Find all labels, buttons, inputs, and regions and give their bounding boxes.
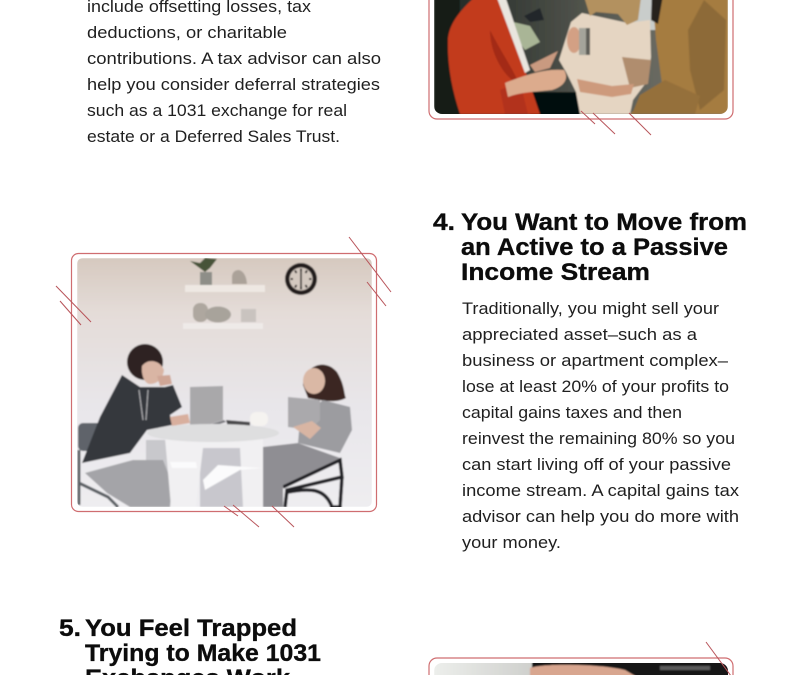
text block: section 3 closing paragraph: estate or a Deferred Sales Trust. bbox=[87, 128, 340, 146]
photo panel: three people talking bbox=[429, 0, 733, 135]
hand and mug bbox=[567, 27, 581, 53]
shelves bbox=[185, 285, 265, 292]
image frame bbox=[72, 254, 376, 512]
image frame bbox=[429, 658, 733, 675]
hair bbox=[582, 0, 642, 25]
forearm bbox=[577, 79, 634, 97]
black counter bbox=[530, 92, 580, 114]
heading: section 4: You Want to Move from bbox=[461, 209, 747, 236]
text block: section 4 paragraph: advisor can help you do more with bbox=[462, 508, 739, 526]
text block: section 3 closing paragraph bbox=[87, 0, 381, 146]
white shirt bbox=[494, 0, 530, 73]
text block: section 3 closing paragraph: contributions. A tax advisor can also bbox=[87, 50, 381, 68]
text block: section 4 paragraph bbox=[462, 300, 739, 552]
photo panel: two women at a table bbox=[56, 237, 391, 527]
heading: section 5: Trying to Make 1031 bbox=[85, 640, 321, 667]
left woman: legs bbox=[85, 460, 172, 507]
text block: section 4 paragraph: Traditionally, you might sell your bbox=[462, 300, 720, 318]
text block: section 3 closing paragraph: deductions, or charitable bbox=[87, 24, 287, 42]
heading: section 4: an Active to a Passive bbox=[461, 234, 728, 261]
clock bbox=[285, 263, 317, 295]
left woman: hoodie bbox=[82, 375, 182, 463]
clasped hands bbox=[505, 70, 566, 97]
heading: section 4 bbox=[433, 209, 747, 286]
tablet bbox=[288, 397, 320, 430]
text block: section 4 paragraph: business or apartment complex– bbox=[462, 352, 728, 370]
heading: section 4: Income Stream bbox=[461, 259, 650, 286]
text block: section 4 paragraph: lose at least 20% of your profits to bbox=[462, 378, 729, 396]
laptop bbox=[190, 386, 223, 431]
left woman: head bbox=[127, 344, 163, 380]
text block: section 4 paragraph: income stream. A capital gains tax bbox=[462, 482, 739, 500]
right woman: sweater bbox=[298, 400, 352, 453]
text block: section 4 paragraph: appreciated asset–such as a bbox=[462, 326, 697, 344]
cream sweater bbox=[559, 13, 651, 114]
photo panel: hand over keyboard bbox=[429, 642, 734, 675]
text block: section 3 closing paragraph: help you consider deferral strategies bbox=[87, 76, 380, 94]
accent lines bbox=[56, 237, 391, 527]
right woman: hair bbox=[303, 365, 346, 401]
text block: section 4 paragraph: capital gains taxes and then bbox=[462, 404, 682, 422]
text block: section 3 closing paragraph: such as a 1031 exchange for real bbox=[87, 102, 347, 120]
heading: section 5 bbox=[59, 615, 321, 675]
left chair bbox=[77, 422, 98, 452]
text block: section 4 paragraph: can start living off of your passive bbox=[462, 456, 731, 474]
heading: section 5: You Feel Trapped bbox=[85, 615, 297, 642]
book and cup bbox=[226, 420, 250, 427]
heading: section 5: 5. bbox=[59, 615, 81, 642]
table bbox=[200, 448, 245, 507]
plant and ornaments bbox=[190, 258, 217, 272]
red jacket bbox=[448, 0, 540, 114]
heading: section 4: 4. bbox=[433, 209, 455, 236]
image frame bbox=[429, 0, 733, 119]
accent lines bbox=[706, 642, 734, 675]
tan jacket bbox=[630, 0, 728, 114]
text block: section 4 paragraph: your money. bbox=[462, 534, 561, 552]
right woman: legs bbox=[263, 443, 340, 507]
table shadow on wall bbox=[146, 440, 168, 472]
right chair bbox=[283, 460, 342, 507]
accent lines bbox=[581, 111, 651, 135]
right woman: face bbox=[303, 368, 325, 394]
text block: section 4 paragraph: reinvest the remaining 80% so you bbox=[462, 430, 735, 448]
